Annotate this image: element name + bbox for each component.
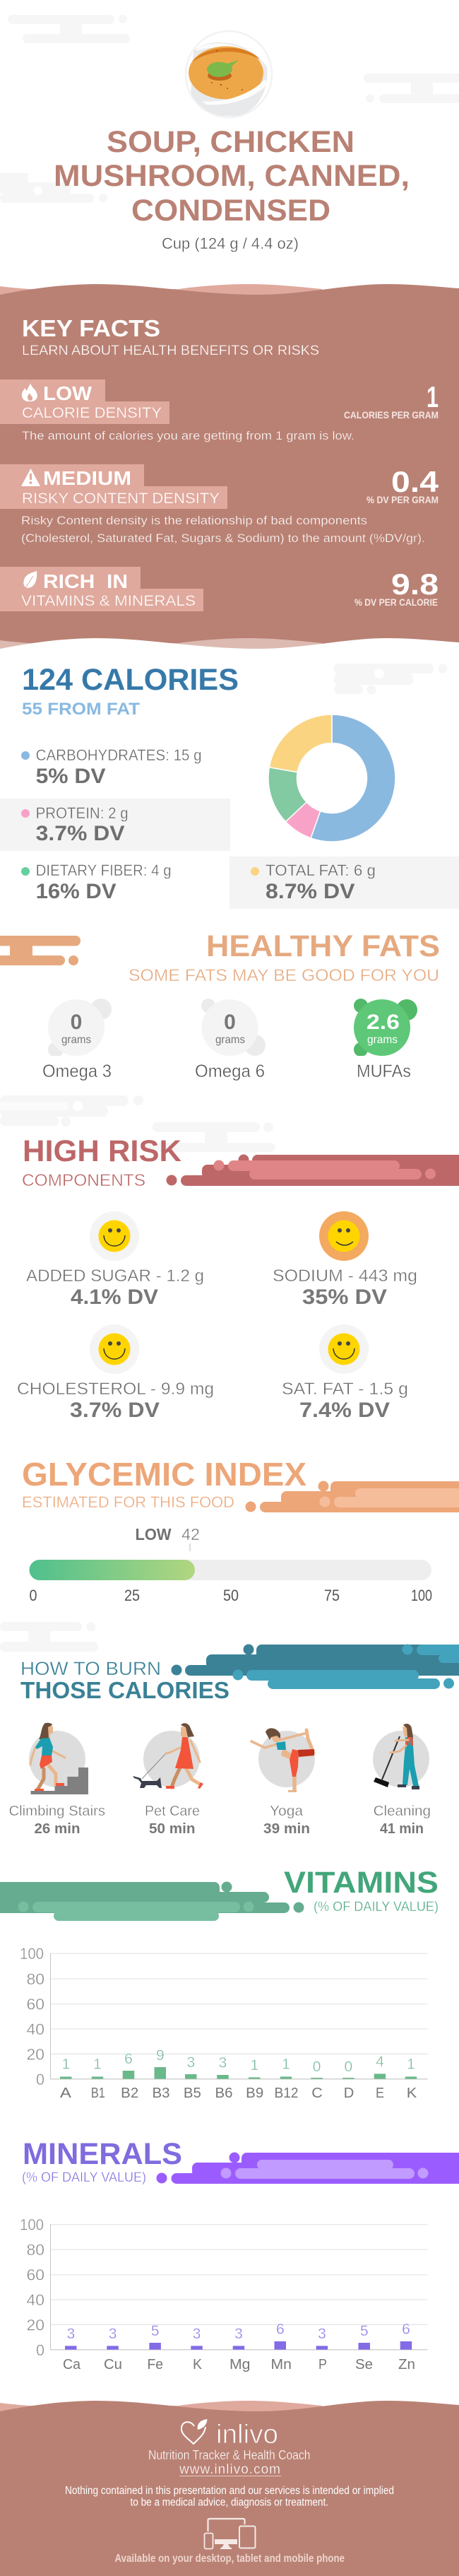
stat: dv per gram: % DV PER GRAM <box>366 494 439 505</box>
bar chart: vitamins: 1 <box>93 2057 102 2073</box>
activity: climbing stairs: Climbing Stairs <box>8 1804 105 1819</box>
gauge bar <box>30 1560 431 1580</box>
badge: rich in vitamins and minerals: VITAMINS & MINERALS <box>21 593 196 609</box>
bar chart: minerals: 3 <box>234 2326 243 2342</box>
decoration: teal bars <box>171 1644 459 1689</box>
bar chart: vitamins: 4 <box>376 2054 384 2070</box>
heading: minerals: MINERALS <box>23 2137 182 2171</box>
icon: basil leaf <box>207 60 239 77</box>
panel: footer <box>0 2401 459 2576</box>
legend: protein: PROTEIN: 2 g <box>36 804 129 822</box>
item: sodium <box>273 1211 417 1309</box>
availability note: Available on your desktop, tablet and mobile phone <box>114 2553 345 2565</box>
bar chart: vitamins: 60 <box>27 1996 44 2013</box>
stat: omega 3: 0 <box>71 1011 82 1034</box>
activity: climbing stairs <box>8 1723 105 1837</box>
badge: low calorie density <box>0 380 169 424</box>
panel: how to burn those calories <box>8 1644 459 1837</box>
title: MUSHROOM, CANNED, <box>54 159 410 193</box>
text: low calorie note: The amount of calories you are getting from 1 gram is low. <box>22 429 354 442</box>
activity: cleaning: 41 min <box>380 1821 424 1837</box>
bar chart: minerals: 100 <box>20 2216 44 2233</box>
panel: key facts <box>0 284 459 658</box>
panel: minerals <box>20 2137 459 2372</box>
bar chart: minerals: 20 <box>27 2317 44 2334</box>
item: added sugar: ADDED SUGAR - 1.2 g <box>26 1266 204 1286</box>
badge: low calorie density: LOW <box>43 382 93 404</box>
bar chart: minerals: Mg <box>230 2357 250 2372</box>
stat: omega 6: Omega 6 <box>195 1061 265 1081</box>
legend: total fat: TOTAL FAT: 6 g <box>266 861 376 879</box>
bar chart: vitamins: 0 <box>36 2071 44 2088</box>
bar chart: minerals: 6 <box>402 2322 410 2338</box>
heading: glycemic index: GLYCEMIC INDEX <box>22 1456 306 1493</box>
bar chart: minerals: 3 <box>193 2326 201 2342</box>
bar chart: vitamins: 80 <box>27 1970 44 1988</box>
stat: calories per gram: CALORIES PER GRAM <box>344 409 439 420</box>
item: cholesterol: CHOLESTEROL - 9.9 mg <box>17 1380 214 1399</box>
badge: rich in vitamins and minerals <box>0 567 203 611</box>
bar chart: vitamins: 0 <box>313 2059 321 2075</box>
bar chart: minerals: Fe <box>147 2357 163 2372</box>
stat: omega 3: Omega 3 <box>42 1061 112 1081</box>
legend: total fat: 8.7% DV <box>266 880 354 903</box>
subheading: from fat: 55 FROM FAT <box>22 700 140 719</box>
heading: those calories: THOSE CALORIES <box>20 1677 230 1703</box>
text: risky content note: Risky Content density is the relationship of bad components <box>21 514 367 527</box>
item: added sugar: 4.1% DV <box>71 1286 158 1309</box>
gauge scale: 100 <box>411 1587 432 1604</box>
gauge scale: 50 <box>223 1587 239 1604</box>
bar chart: minerals: 80 <box>27 2241 44 2259</box>
bar chart: vitamins: 1 <box>250 2057 258 2074</box>
legend: total fat <box>230 857 459 909</box>
bar chart: minerals: 3 <box>109 2326 117 2342</box>
bar chart: minerals: 0 <box>36 2341 44 2359</box>
legend: protein <box>0 799 230 851</box>
logo: inlivo <box>181 2419 278 2449</box>
bar chart: vitamins: C <box>311 2086 323 2101</box>
bar chart: vitamins: B1 <box>91 2086 105 2101</box>
gauge scale <box>30 1587 432 1604</box>
gauge scale: 75 <box>324 1587 340 1604</box>
item: added sugar <box>26 1211 204 1309</box>
bar chart: vitamins: 1 <box>407 2057 415 2073</box>
activity: pet care: Pet Care <box>145 1804 200 1819</box>
activity: pet care: 50 min <box>149 1821 195 1837</box>
heading: key facts: KEY FACTS <box>22 315 160 341</box>
bar chart: vitamins: 100 <box>20 1945 44 1963</box>
activity: yoga: Yoga <box>270 1804 304 1819</box>
gauge scale: 25 <box>124 1587 140 1604</box>
text: risky content note <box>21 514 425 545</box>
stat: omega 6 <box>195 999 266 1081</box>
bar chart: minerals: 5 <box>360 2323 369 2339</box>
donut chart <box>268 714 395 842</box>
activity: climbing stairs: 26 min <box>34 1821 81 1837</box>
decoration: orange bars <box>0 936 81 965</box>
bar chart: vitamins: A <box>60 2086 72 2101</box>
bar chart: vitamins: 20 <box>27 2045 44 2064</box>
icon: flame <box>22 383 37 401</box>
item: sodium: 35% DV <box>302 1286 387 1309</box>
stat: calories per gram: 1 <box>427 380 439 413</box>
bar chart: minerals: 40 <box>27 2291 44 2309</box>
bar chart: minerals: Zn <box>398 2357 415 2372</box>
heading: healthy fats: HEALTHY FATS <box>206 929 440 963</box>
bar chart: vitamins: 1 <box>61 2057 70 2073</box>
gauge scale: 0 <box>30 1587 37 1604</box>
stat: mufas: MUFAs <box>357 1061 411 1081</box>
bar chart: vitamins: B3 <box>153 2086 169 2101</box>
decoration: orange bars <box>246 1481 459 1512</box>
decoration: green bars <box>0 1881 304 1921</box>
disclaimer: to be a medical advice, diagnosis or treatment. <box>130 2497 328 2509</box>
bar chart: minerals: 6 <box>276 2322 285 2338</box>
activity: yoga <box>251 1728 315 1837</box>
bar chart: minerals: P <box>318 2357 327 2372</box>
bar chart: minerals: 5 <box>151 2323 160 2339</box>
activity: cleaning <box>373 1724 431 1837</box>
stat: dv per gram <box>366 465 439 505</box>
heading: vitamins: VITAMINS <box>284 1866 439 1900</box>
bar chart: vitamins <box>20 1945 428 2101</box>
title: CONDENSED <box>131 194 330 228</box>
disclaimer <box>65 2485 394 2509</box>
item: saturated fat: 7.4% DV <box>299 1399 390 1422</box>
bar chart: vitamins: B2 <box>121 2086 138 2101</box>
bar chart: vitamins: B6 <box>215 2086 233 2101</box>
logo: inlivo: inlivo <box>216 2420 278 2449</box>
bar chart: vitamins: 1 <box>282 2057 290 2073</box>
stat: dv per calorie: % DV PER CALORIE <box>354 596 438 608</box>
website link: www.inlivo.com <box>179 2462 280 2477</box>
subheading: ESTIMATED FOR THIS FOOD <box>22 1493 234 1511</box>
stat: dv per calorie: 9.8 <box>391 567 439 601</box>
bar chart: minerals <box>20 2216 428 2372</box>
item: cholesterol: 3.7% DV <box>70 1399 160 1422</box>
item: saturated fat: SAT. FAT - 1.5 g <box>282 1380 408 1399</box>
legend: dietary fiber <box>21 861 172 903</box>
serving size: Cup (124 g / 4.4 oz) <box>162 235 299 252</box>
bar chart: minerals: 3 <box>66 2326 75 2342</box>
heading: calories: 124 CALORIES <box>22 663 239 697</box>
stat: calories per gram <box>344 380 439 420</box>
subheading: components: COMPONENTS <box>22 1171 145 1190</box>
activity: pet care <box>133 1723 203 1837</box>
stat: omega 6: 0 <box>224 1011 236 1034</box>
bar chart: vitamins: D <box>344 2086 354 2101</box>
text: risky content note: (Cholesterol, Saturated Fat, Sugars & Sodium) to the amount (%DV/gr). <box>21 531 425 545</box>
subheading: LEARN ABOUT HEALTH BENEFITS OR RISKS <box>22 343 319 358</box>
bar chart: minerals: Cu <box>104 2357 122 2372</box>
panel: calories <box>0 663 459 909</box>
bar chart: minerals: 60 <box>27 2266 44 2284</box>
activity: cleaning: Cleaning <box>374 1804 431 1819</box>
badge: rich in vitamins and minerals: RICH IN <box>43 570 128 592</box>
icon: devices <box>205 2519 256 2549</box>
bar chart: vitamins: B12 <box>274 2086 298 2101</box>
icon: warning triangle <box>21 469 40 486</box>
bar chart: vitamins: 3 <box>186 2054 195 2071</box>
subheading: SOME FATS MAY BE GOOD FOR YOU <box>129 966 439 985</box>
stat: mufas: 2.6 <box>366 1011 400 1034</box>
item: cholesterol <box>17 1324 214 1422</box>
item: saturated fat <box>282 1324 408 1422</box>
badge: low calorie density: CALORIE DENSITY <box>22 405 162 421</box>
panel: healthy fats <box>0 929 440 1081</box>
icon: leaf <box>23 571 37 588</box>
title: SOUP, CHICKEN <box>107 125 354 159</box>
subheading: daily value: (% OF DAILY VALUE) <box>22 2170 146 2185</box>
legend: dietary fiber: DIETARY FIBER: 4 g <box>36 861 172 879</box>
bar chart: vitamins: 9 <box>156 2047 165 2064</box>
decoration: purple bars <box>157 2153 459 2184</box>
title <box>54 125 410 228</box>
badge: medium risky content density: RISKY CONTENT DENSITY <box>22 490 220 507</box>
activity: yoga: 39 min <box>263 1821 310 1837</box>
decoration: red bars <box>167 1155 459 1186</box>
legend: carbohydrates: 5% DV <box>36 765 106 788</box>
bar chart: minerals: K <box>193 2357 203 2372</box>
stat: omega 3: grams <box>61 1034 91 1046</box>
item: sodium: SODIUM - 443 mg <box>273 1266 417 1286</box>
stat: omega 6: grams <box>215 1034 245 1046</box>
stat: mufas: grams <box>367 1034 398 1046</box>
legend: dietary fiber: 16% DV <box>36 880 117 903</box>
panel: glycemic index <box>22 1456 459 1604</box>
gauge label: 42 <box>181 1525 200 1543</box>
icon: soup bowl <box>186 31 272 117</box>
tagline: Nutrition Tracker & Health Coach <box>148 2448 311 2462</box>
badge: medium risky content density: MEDIUM <box>43 467 131 489</box>
bar chart: vitamins: 0 <box>345 2059 352 2075</box>
panel: vitamins <box>0 1866 439 2101</box>
bar chart: vitamins: 6 <box>124 2051 133 2067</box>
badge: medium risky content density <box>0 464 227 509</box>
panel: high risk components <box>17 1134 459 1422</box>
stat: dv per calorie <box>354 567 439 608</box>
bar chart: vitamins: 3 <box>219 2055 227 2071</box>
gauge label: LOW <box>136 1525 172 1543</box>
bar chart: minerals: 3 <box>318 2326 326 2342</box>
bar chart: vitamins: K <box>407 2086 417 2101</box>
bar chart: vitamins: B9 <box>246 2086 263 2101</box>
heading: how to burn: HOW TO BURN <box>20 1658 161 1679</box>
bar chart: vitamins: E <box>376 2086 384 2101</box>
legend: carbohydrates: CARBOHYDRATES: 15 g <box>36 746 202 764</box>
legend: carbohydrates <box>21 746 202 788</box>
disclaimer: Nothing contained in this presentation and our services is intended or implied <box>65 2485 394 2497</box>
subheading: daily value: (% OF DAILY VALUE) <box>314 1900 439 1915</box>
stat: mufas <box>354 999 417 1081</box>
bar chart: minerals: Mn <box>271 2357 292 2372</box>
bar chart: vitamins: B5 <box>184 2086 201 2101</box>
bar chart: minerals: Se <box>355 2357 373 2372</box>
gauge label <box>136 1525 200 1551</box>
stat: omega 3 <box>42 999 112 1081</box>
heading: high risk: HIGH RISK <box>23 1134 181 1168</box>
bar chart: minerals: Ca <box>63 2357 81 2372</box>
bar chart: vitamins: 40 <box>27 2021 44 2038</box>
stat: dv per gram: 0.4 <box>391 465 439 498</box>
legend: protein: 3.7% DV <box>36 822 125 845</box>
